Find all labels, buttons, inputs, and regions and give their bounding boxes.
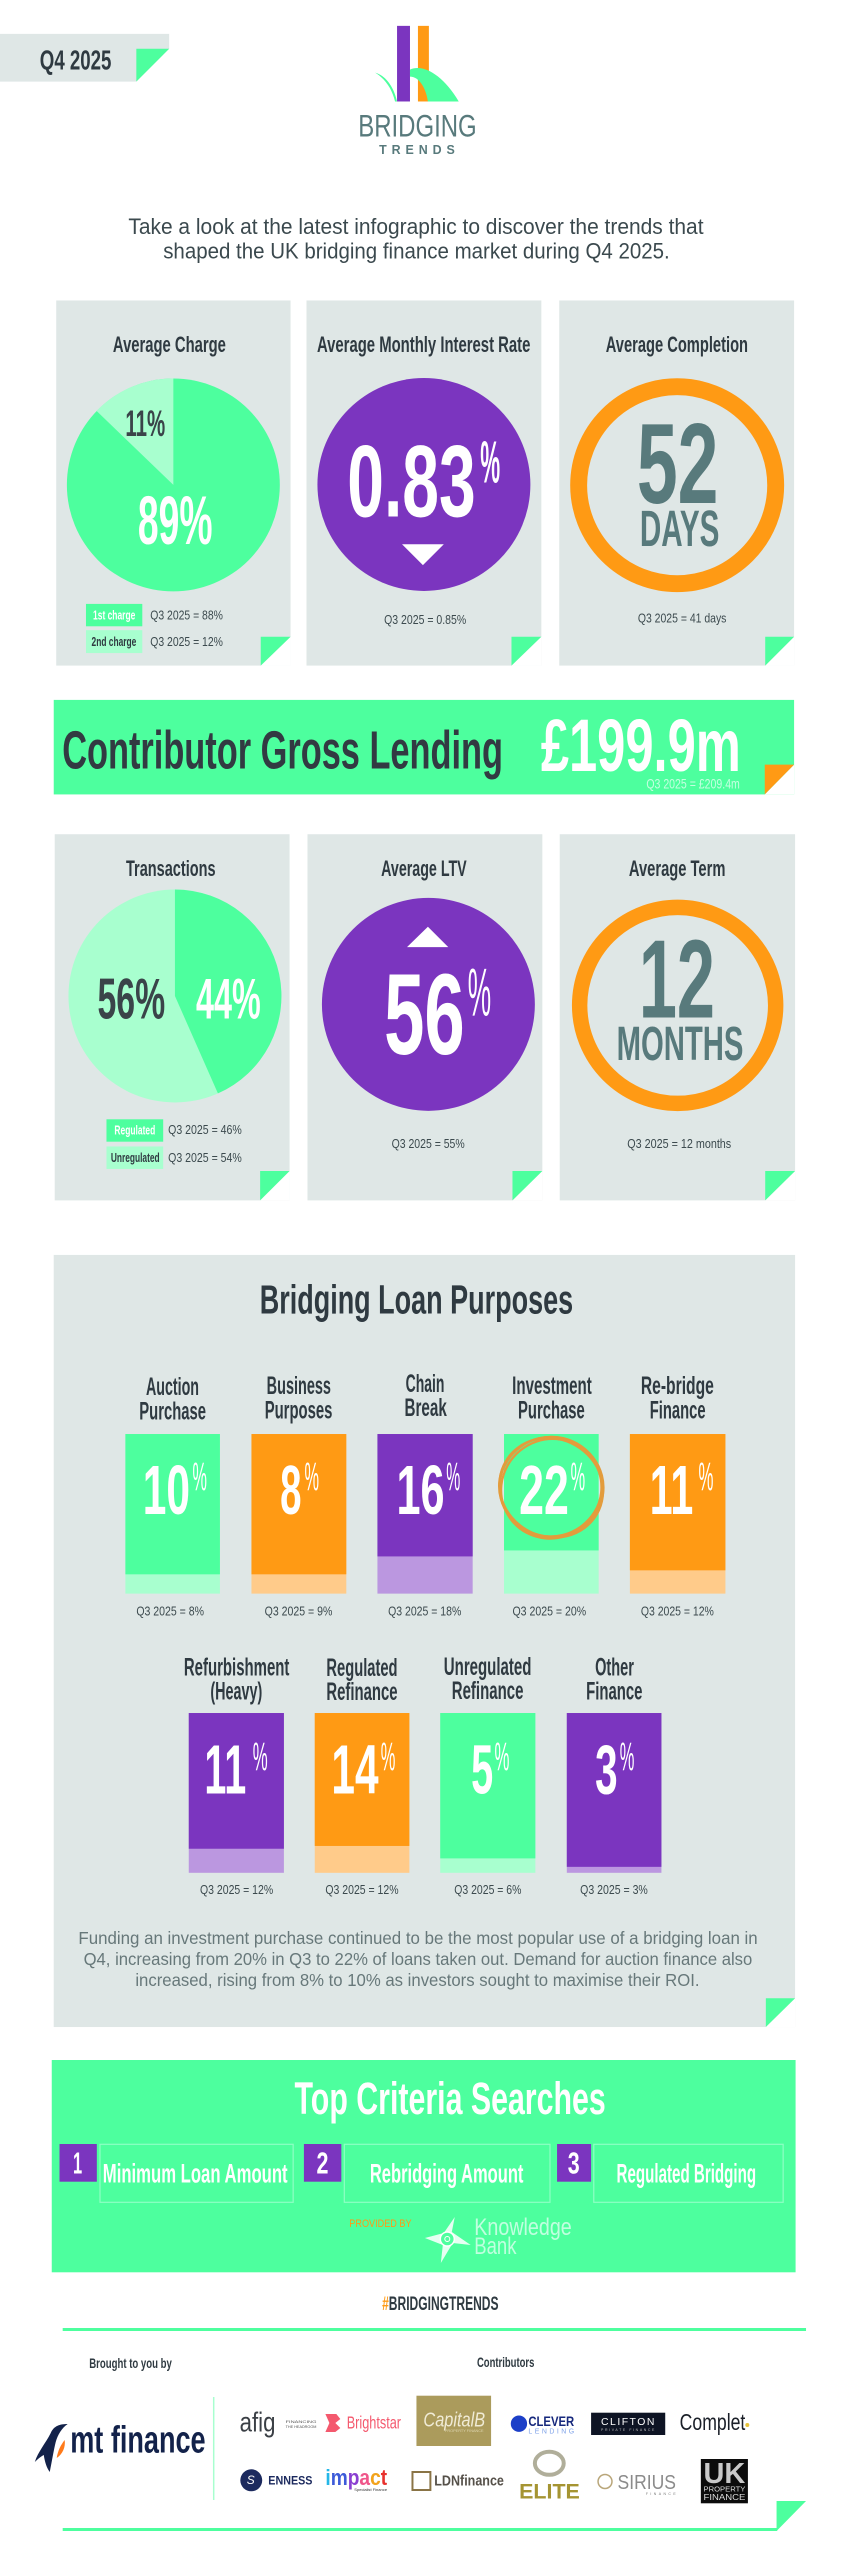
criterion 1: Minimum Loan Amount <box>103 2159 288 2189</box>
provider: knowledge bank: PROVIDED BY <box>349 2218 412 2230</box>
banner: contributor gross lending: Contributor Gross Lending <box>62 721 503 781</box>
heading: top criteria searches: Top Criteria Searches <box>295 2073 606 2124</box>
panel: top criteria searches <box>52 2060 796 2272</box>
bar: other finance: Finance <box>586 1678 642 1706</box>
heading: transactions: Transactions <box>126 856 216 881</box>
bar: business purposes <box>251 1372 346 1619</box>
bar: other finance: Q3 2025 = 3% <box>580 1882 648 1897</box>
bar: investment purchase: 22 <box>519 1451 569 1529</box>
bar: refurbishment heavy: Refurbishment <box>184 1653 289 1681</box>
logo: clifton <box>591 2413 665 2435</box>
legend: charge <box>86 604 223 653</box>
criterion 2: 2 <box>316 2145 328 2180</box>
text block: purposes commentary <box>78 1928 758 1990</box>
circle stat: 0.83%: % <box>480 429 500 496</box>
legend: charge: Q3 2025 = 88% <box>150 607 223 622</box>
provider: knowledge bank: Knowledge <box>474 2214 572 2241</box>
circle stat: 0.83%: 0.83 <box>347 423 476 538</box>
bar: auction purchase: Q3 2025 = 8% <box>136 1604 204 1619</box>
logo: afig: FINANCING <box>286 2419 316 2424</box>
heading: bridging loan purposes: Bridging Loan Purposes <box>260 1277 573 1323</box>
bar: unregulated refinance: Q3 2025 = 6% <box>454 1882 522 1897</box>
ring stat: 52 days: 52 <box>637 400 718 528</box>
bar: chain break: 16 <box>396 1451 445 1529</box>
legend: transactions: Unregulated <box>111 1150 160 1165</box>
comparison: completion: Q3 2025 = 41 days <box>638 610 726 625</box>
logo: sirius <box>598 2472 676 2496</box>
pie chart: regulated vs unregulated <box>68 890 281 1102</box>
logo: clever lending: CLEVER <box>528 2414 574 2429</box>
logo: capitalb: PROPERTY FINANCE <box>445 2428 484 2433</box>
bar: auction purchase: 10 <box>143 1451 190 1529</box>
logo: mt finance <box>35 2419 206 2472</box>
logo: sirius: SIRIUS <box>618 2472 676 2494</box>
criterion 2 <box>304 2144 550 2202</box>
highlight: hand drawn circle <box>481 1418 622 1559</box>
tag: quarter label: Q4 2025 <box>40 45 111 76</box>
heading: average charge: Average Charge <box>113 332 226 357</box>
bar: refurbishment heavy: 11 <box>204 1731 246 1809</box>
legend: transactions: Q3 2025 = 54% <box>168 1150 242 1165</box>
bar: chain break <box>377 1370 473 1619</box>
bar: investment purchase: Investment <box>512 1372 592 1400</box>
bar: business purposes: Q3 2025 = 9% <box>265 1604 333 1619</box>
panel: average monthly interest rate <box>306 300 541 666</box>
criterion 1 <box>60 2144 293 2202</box>
bar: business purposes: % <box>305 1456 319 1500</box>
bar: regulated refinance: % <box>381 1735 395 1779</box>
bar: re-bridge finance: % <box>699 1456 713 1500</box>
bar: other finance: 3 <box>595 1731 618 1809</box>
ring stat: 12 months <box>580 907 776 1103</box>
banner: contributor gross lending: £199.9m <box>541 703 741 787</box>
heading: interest rate: Average Monthly Interest Rate <box>317 332 530 357</box>
bar: auction purchase <box>125 1373 220 1619</box>
logo: LDN finance: LDNfinance <box>434 2472 504 2489</box>
circle stat: 56%: % <box>468 955 491 1030</box>
bar: auction purchase: Purchase <box>139 1398 206 1426</box>
text block: purposes commentary: increased, rising from 8% to 10% as investors sought to maximise their ROI. <box>135 1970 700 1990</box>
logo: afig <box>240 2407 316 2438</box>
bar: unregulated refinance: % <box>495 1735 509 1779</box>
logo: enness <box>240 2469 312 2491</box>
circle stat: 56%: 56 <box>384 951 465 1079</box>
logo: brightstar <box>325 2412 401 2432</box>
logo: elite: ELITE <box>519 2480 580 2503</box>
logo: Bridging Trends: TRENDS <box>379 143 455 157</box>
panel: average completion <box>559 300 794 666</box>
heading: contributors: Contributors <box>477 2354 535 2370</box>
bar: regulated refinance: Q3 2025 = 12% <box>325 1882 399 1897</box>
footer frame <box>63 2328 806 2531</box>
logo: uk property finance: UK <box>704 2458 745 2490</box>
text block: purposes commentary: Q4, increasing from 20% in Q3 to 22% of loans taken out. Demand for auction finance also <box>84 1949 752 1969</box>
pie chart: regulated vs unregulated: 44% <box>196 967 261 1031</box>
bar: refurbishment heavy: (Heavy) <box>210 1678 262 1706</box>
bar: investment purchase: % <box>571 1456 585 1500</box>
bar: other finance: % <box>620 1735 634 1779</box>
criterion 3 <box>557 2144 783 2202</box>
comparison: interest rate: Q3 2025 = 0.85% <box>384 612 467 627</box>
bar: chain break: Break <box>405 1394 447 1422</box>
criterion 3: 3 <box>568 2145 580 2180</box>
logo: elite <box>519 2452 580 2503</box>
panel: average term <box>560 834 795 1200</box>
logo: sirius: FINANCE <box>646 2492 676 2496</box>
bar: investment purchase: Purchase <box>518 1397 585 1425</box>
pie chart: charge split: 11% <box>125 403 165 444</box>
logo: afig: THE HEADROOM <box>286 2424 316 2429</box>
tag: quarter label <box>0 34 169 82</box>
logo: complete: Complet <box>680 2409 746 2435</box>
ring stat: 12 months: MONTHS <box>617 1018 743 1071</box>
logo: uk property finance: PROPERTY <box>704 2484 745 2494</box>
bar: regulated refinance: Regulated <box>326 1654 398 1682</box>
logo: enness: S <box>247 2473 255 2487</box>
bar: business purposes: 8 <box>280 1451 302 1529</box>
intro text <box>128 214 704 264</box>
bar: unregulated refinance: Unregulated <box>444 1653 531 1681</box>
legend: charge: 2nd charge <box>92 634 136 649</box>
legend: transactions: Regulated <box>114 1123 155 1138</box>
comparison: LTV: Q3 2025 = 55% <box>392 1136 465 1151</box>
bar: auction purchase: % <box>193 1456 207 1500</box>
intro text: Take a look at the latest infographic to discover the trends that <box>128 214 704 239</box>
provider: knowledge bank <box>349 2214 572 2263</box>
logo: enness: ENNESS <box>268 2473 312 2487</box>
logo: capitalb: CapitalB <box>423 2410 485 2432</box>
logo: clever lending <box>511 2414 574 2436</box>
logo: clever lending: LENDING <box>528 2428 574 2436</box>
banner: contributor gross lending <box>54 700 794 794</box>
pie chart: regulated vs unregulated: 56% <box>98 967 165 1031</box>
comparison: term: Q3 2025 = 12 months <box>627 1136 731 1151</box>
bar: re-bridge finance: Q3 2025 = 12% <box>641 1604 714 1619</box>
ring stat: 12 months: 12 <box>639 916 715 1041</box>
logo: mt finance: mt finance <box>70 2419 206 2461</box>
bar: other finance <box>567 1653 661 1897</box>
panel: average LTV <box>307 834 542 1200</box>
legend: transactions: Q3 2025 = 46% <box>168 1122 242 1137</box>
panel: bridging loan purposes <box>54 1255 795 2027</box>
panel: transactions <box>55 834 290 1200</box>
logo: impact: Specialist Finance <box>354 2488 387 2492</box>
bar: investment purchase <box>481 1372 622 1619</box>
bar: chain break: % <box>446 1456 460 1500</box>
legend: transactions <box>106 1119 242 1169</box>
ring stat: 52 days: DAYS <box>640 500 719 557</box>
bar: chain break: Q3 2025 = 18% <box>388 1604 462 1619</box>
bar: re-bridge finance: 11 <box>650 1451 693 1529</box>
circle stat: 0.83% <box>317 378 530 591</box>
banner: contributor gross lending: Q3 2025 = £209.4m <box>646 776 740 791</box>
bar: refurbishment heavy <box>184 1653 289 1897</box>
pie chart: charge split <box>67 378 280 591</box>
bar: re-bridge finance: Re-bridge <box>641 1372 714 1400</box>
logo: afig: afig <box>240 2407 275 2438</box>
bar: business purposes: Business <box>267 1372 331 1400</box>
intro text: shaped the UK bridging finance market during Q4 2025. <box>163 239 670 264</box>
bar: unregulated refinance: 5 <box>471 1731 493 1809</box>
logo: uk property finance: FINANCE <box>704 2493 745 2502</box>
criterion 2: Rebridging Amount <box>370 2159 523 2189</box>
logo: uk property finance <box>701 2458 748 2503</box>
bar: auction purchase: Auction <box>146 1373 199 1401</box>
criterion 1: 1 <box>73 2145 82 2180</box>
heading: LTV: Average LTV <box>381 856 467 881</box>
heading: brought to you by: Brought to you by <box>89 2355 172 2371</box>
text block: purposes commentary: Funding an investment purchase continued to be the most popular use of a bridging loan in <box>78 1928 758 1948</box>
bar: unregulated refinance <box>440 1653 535 1897</box>
logo: capitalb <box>416 2396 491 2446</box>
bar: unregulated refinance: Refinance <box>452 1677 523 1705</box>
bar: regulated refinance: Refinance <box>326 1678 398 1706</box>
heading: completion: Average Completion <box>606 332 748 357</box>
logo: Bridging Trends: BRIDGING <box>358 107 477 143</box>
provider: knowledge bank: Bank <box>474 2233 516 2260</box>
bar: investment purchase: Q3 2025 = 20% <box>512 1604 587 1619</box>
bar: re-bridge finance <box>630 1372 725 1619</box>
bar: other finance: Other <box>595 1653 634 1681</box>
bar: regulated refinance <box>315 1654 409 1897</box>
logo: LDN finance <box>412 2472 504 2490</box>
logo: clifton: CLIFTON <box>601 2417 654 2428</box>
bar: chain break: Chain <box>406 1370 444 1398</box>
bar: regulated refinance: 14 <box>331 1731 379 1809</box>
logo: clifton: PRIVATE FINANCE <box>601 2428 655 2432</box>
legend: charge: Q3 2025 = 12% <box>150 634 223 649</box>
logo: brightstar: Brightstar <box>347 2412 401 2432</box>
panel: average charge <box>56 300 291 666</box>
logo: impact: impact <box>325 2465 388 2490</box>
bar: refurbishment heavy: Q3 2025 = 12% <box>200 1882 274 1897</box>
hashtag: #BRIDGINGTRENDS <box>382 2293 499 2315</box>
bar: refurbishment heavy: % <box>253 1735 268 1779</box>
circle stat: 56% <box>322 898 535 1111</box>
ring stat: 52 days <box>579 387 776 584</box>
legend: charge: 1st charge <box>93 607 135 622</box>
bar: re-bridge finance: Finance <box>650 1397 706 1425</box>
logo: Bridging Trends <box>358 26 477 157</box>
heading: term: Average Term <box>629 856 725 881</box>
bar: business purposes: Purposes <box>265 1397 332 1425</box>
pie chart: charge split: 89% <box>138 482 213 559</box>
